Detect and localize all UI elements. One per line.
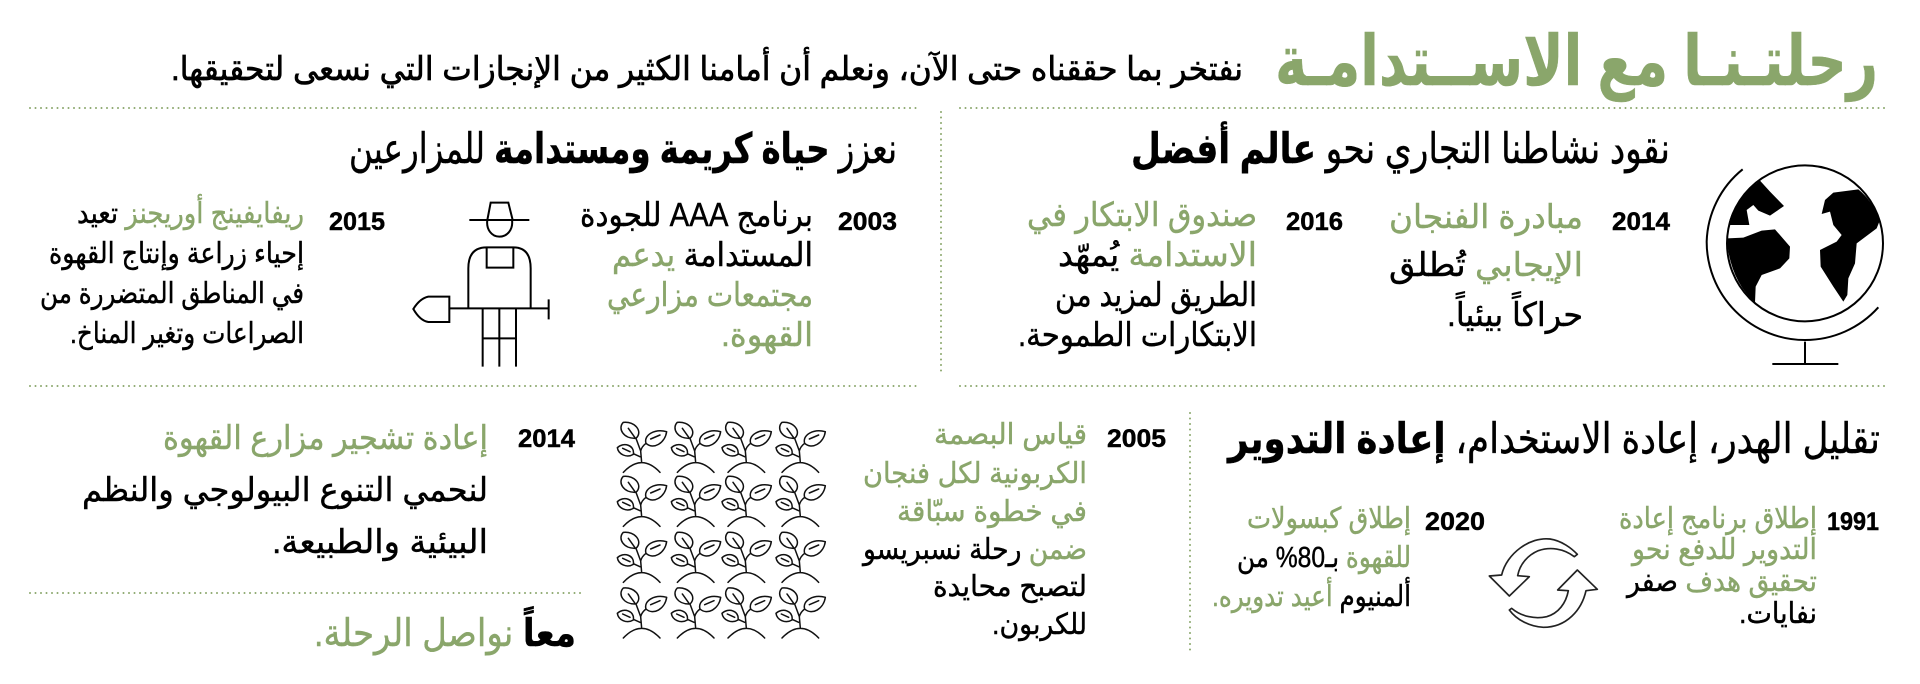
milestone: 2014 cup: حراكاً بيئياً. [1447, 291, 1583, 334]
icon: recycling arrows [1489, 539, 1597, 627]
subtitle: نفتخر بما حققناه حتى الآن، ونعلم أن أمامنا الكثير من الإنجازات التي نسعى لتحقيقها. [171, 47, 1243, 88]
milestone: 2014 cup: 2014 [1612, 208, 1670, 236]
milestone: 2014 reforestation: 2014 [518, 425, 575, 453]
icon: farmer [413, 203, 549, 367]
milestone: 2014 cup: مبادرة الفنجان [1389, 198, 1583, 236]
milestone: 1991 recycling: 1991 [1827, 508, 1879, 536]
milestone: 2015 reviving origins [40, 193, 385, 350]
milestone: 2016 fund: الاستدامة يُمهّد [1058, 236, 1257, 274]
milestone: 2015 reviving origins: ريفايفينج أوريجنز تعيد [77, 193, 304, 230]
icon: seedlings [617, 422, 825, 638]
milestone: 2005 carbon: الكربونية لكل فنجان [863, 458, 1087, 490]
panel: farmers [40, 125, 897, 367]
panel: carbon and reforestation [82, 419, 1166, 656]
milestone: 2015 reviving origins: في المناطق المتضررة من [40, 278, 304, 311]
milestone: 2016 fund: الطريق لمزيد من [1055, 276, 1257, 315]
milestone: 2020 capsules: 2020 [1425, 508, 1485, 536]
milestone: 2003 AAA: مجتمعات مزارعي [607, 276, 813, 314]
milestone: 2003 AAA [580, 196, 897, 354]
milestone: 2003 AAA: 2003 [838, 208, 897, 236]
milestone: 1991 recycling [1619, 503, 1879, 630]
milestone: 2016 fund [1018, 196, 1343, 354]
milestone: 2014 reforestation [82, 419, 575, 561]
milestone: 2005 carbon: للكربون. [992, 609, 1087, 641]
milestone: 2014 reforestation: لنحمي التنوع البيولوجي والنظم [82, 471, 488, 509]
panel: recycling [1212, 415, 1880, 630]
milestone: 2014 cup [1389, 198, 1670, 334]
heading: farmers: نعزز حياة كريمة ومستدامة للمزارعين [349, 125, 897, 174]
milestone: 2016 fund: صندوق الابتكار في [1027, 196, 1257, 234]
panel: better world [1018, 121, 1883, 364]
milestone: 2016 fund: 2016 [1286, 208, 1343, 236]
milestone: 2014 cup: الإيجابي تُطلق [1389, 246, 1583, 285]
milestone: 1991 recycling: إطلاق برنامج إعادة [1619, 503, 1817, 536]
milestone: 2015 reviving origins: الصراعات وتغير المناخ. [70, 318, 304, 350]
milestone: 2016 fund: الابتكارات الطموحة. [1018, 316, 1257, 354]
milestone: 1991 recycling: التدوير للدفع نحو [1630, 534, 1817, 566]
milestone: 2003 AAA: القهوة. [721, 316, 813, 354]
milestone: 2003 AAA: المستدامة يدعم [612, 236, 813, 274]
closing line: معاً نواصل الرحلة. [314, 606, 576, 656]
milestone: 2005 carbon: 2005 [1107, 425, 1166, 453]
milestone: 2005 carbon: لتصبح محايدة [933, 571, 1087, 603]
milestone: 2020 capsules: إطلاق كبسولات [1247, 503, 1411, 536]
milestone: 2014 reforestation: إعادة تشجير مزارع القهوة [163, 419, 488, 458]
milestone: 2015 reviving origins: إحياء زراعة وإنتاج القهوة [49, 238, 304, 271]
milestone: 2014 reforestation: البيئية والطبيعة. [272, 523, 488, 561]
milestone: 2020 capsules: ألمنيوم أعيد تدويره. [1212, 576, 1411, 613]
milestone: 2020 capsules [1212, 503, 1485, 613]
milestone: 2005 carbon: ضمن رحلة نسبريسو [861, 534, 1087, 566]
heading: better world: نقود نشاطنا التجاري نحو عالم أفضل [1131, 121, 1670, 173]
icon: globe [1707, 165, 1883, 364]
milestone: 2005 carbon [861, 419, 1166, 641]
milestone: 2005 carbon: قياس البصمة [934, 419, 1087, 451]
milestone: 1991 recycling: نفايات. [1739, 598, 1817, 630]
milestone: 2005 carbon: في خطوة سبّاقة [897, 496, 1087, 529]
milestone: 2015 reviving origins: 2015 [329, 208, 385, 236]
milestone: 2003 AAA: برنامج AAA للجودة [580, 196, 813, 234]
milestone: 1991 recycling: تحقيق هدف صفر [1625, 566, 1817, 598]
milestone: 2020 capsules: للقهوة بـ80% من [1237, 542, 1411, 574]
